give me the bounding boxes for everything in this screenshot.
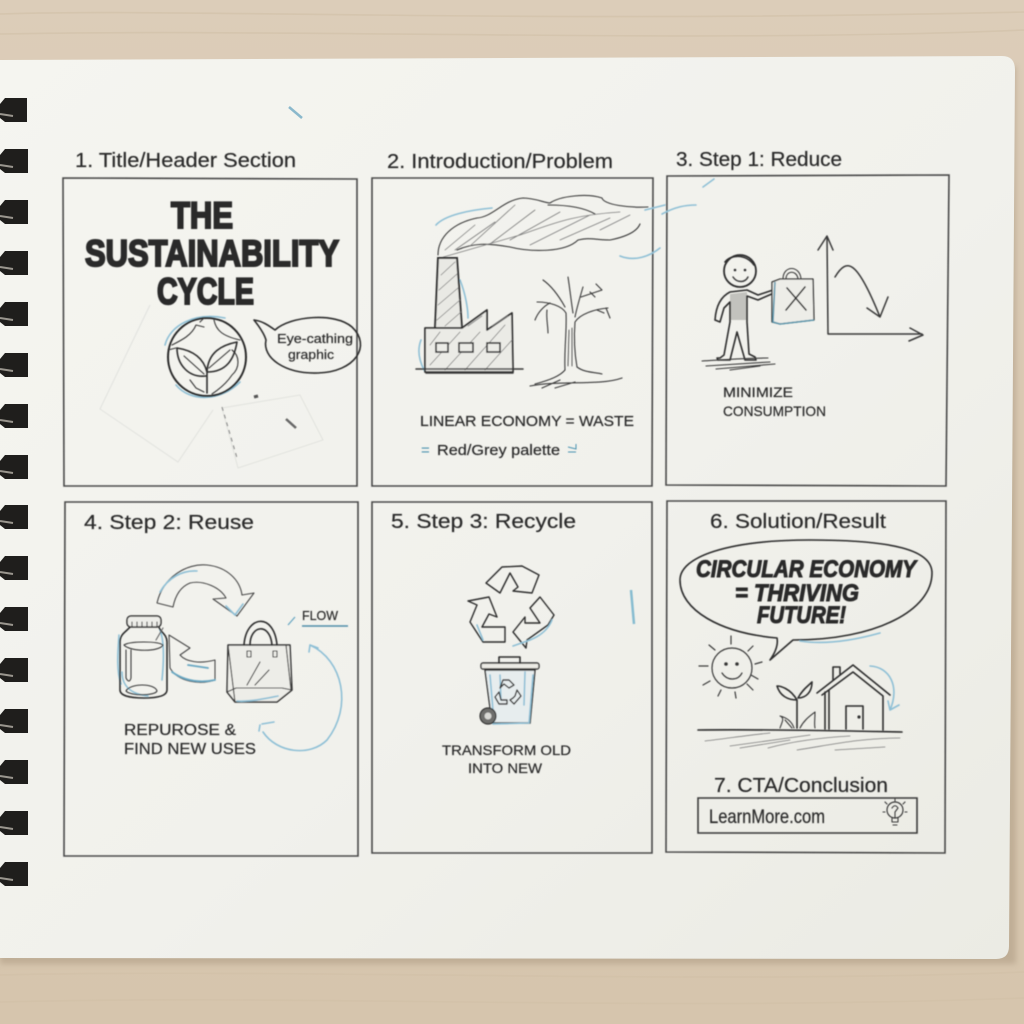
text: minimize consumption: CONSUMPTION bbox=[723, 403, 826, 419]
arrow: top curved reuse arrow bbox=[157, 565, 254, 616]
text: repurpose and find new uses: FIND NEW USES bbox=[124, 741, 256, 758]
icon: tote bag bbox=[227, 621, 292, 702]
text: red and grey palette note: = bbox=[421, 442, 430, 459]
callout: eye-catching graphic: Eye-cathing bbox=[277, 331, 353, 346]
arrow: lower return arrow bbox=[169, 635, 215, 682]
panel 3 frame bbox=[666, 175, 949, 486]
text: red and grey palette note: Red/Grey palette bbox=[437, 442, 560, 459]
panel 2: introduction and problem bbox=[372, 151, 665, 486]
main title: CYCLE bbox=[157, 271, 254, 312]
speech bubble: circular economy result bbox=[680, 540, 932, 660]
callout: eye-catching graphic bbox=[254, 317, 360, 373]
text: transform old into new bbox=[442, 742, 571, 776]
text: repurpose and find new uses: REPUROSE & bbox=[124, 722, 236, 739]
panel 3 heading: 3. Step 1: Reduce bbox=[676, 149, 842, 171]
icon: bare tree bbox=[530, 277, 622, 388]
icon: factory with smoke bbox=[416, 196, 665, 373]
panel 5 heading: 5. Step 3: Recycle bbox=[391, 511, 576, 533]
speech bubble: circular economy result: FUTURE! bbox=[757, 602, 846, 629]
icon: recycling arrows bbox=[468, 566, 554, 648]
chimney bbox=[435, 258, 462, 328]
website text: LearnMore.com bbox=[709, 806, 825, 828]
chart: falling consumption arrow bbox=[818, 236, 923, 341]
text: minimize consumption bbox=[723, 384, 826, 419]
panel 1: title and header section bbox=[63, 150, 360, 486]
panel 4 frame bbox=[64, 502, 358, 856]
label: flow with underline: FLOW bbox=[302, 609, 338, 623]
text: minimize consumption: MINIMIZE bbox=[723, 384, 793, 400]
panel 4 heading: 4. Step 2: Reuse bbox=[84, 512, 254, 534]
icon: recycling bin bbox=[480, 657, 539, 724]
smoke cloud bbox=[438, 196, 648, 255]
panel 4: step 2 reuse bbox=[64, 502, 358, 856]
speech bubble: circular economy result: CIRCULAR ECONOMY bbox=[696, 556, 918, 583]
icon: globe with leaves bbox=[165, 317, 246, 397]
callout: eye-catching graphic: graphic bbox=[288, 347, 335, 362]
panel 2 heading: 2. Introduction/Problem bbox=[387, 151, 613, 173]
icon: smiling sun bbox=[699, 636, 762, 698]
spiral binding rings bbox=[0, 98, 28, 886]
panel 6 heading: 6. Solution/Result bbox=[710, 511, 886, 533]
factory building bbox=[425, 310, 513, 372]
panel 5: step 3 recycle bbox=[372, 502, 652, 853]
icon: glass jar bbox=[118, 616, 167, 698]
panel 7 heading: 7. CTA/Conclusion bbox=[714, 775, 888, 797]
panel 1 frame bbox=[63, 178, 357, 486]
text: repurpose and find new uses bbox=[124, 722, 256, 758]
text: transform old into new: INTO NEW bbox=[468, 760, 543, 776]
panel 1 heading: 1. Title/Header Section bbox=[75, 150, 296, 172]
main title: THE bbox=[171, 195, 233, 236]
main title bbox=[85, 195, 339, 312]
call to action box bbox=[698, 798, 917, 833]
stray blue mark bbox=[289, 107, 302, 118]
label: flow with underline bbox=[288, 609, 348, 626]
blue pen mark bbox=[631, 590, 634, 624]
panel 6: solution and result bbox=[666, 501, 946, 853]
panel 6 frame bbox=[666, 501, 946, 853]
text: transform old into new: TRANSFORM OLD bbox=[442, 742, 571, 758]
panel 5 frame bbox=[372, 502, 652, 853]
arrow: thin blue flow arrow bbox=[259, 645, 342, 751]
icon: plant and house on ground bbox=[698, 665, 902, 750]
shopping bag bbox=[772, 279, 814, 324]
pencil smudges bbox=[286, 419, 296, 428]
text: linear economy equals waste: LINEAR ECONOMY = WASTE bbox=[420, 413, 634, 430]
faint pencil sheets bbox=[100, 305, 323, 468]
blue pen marks bbox=[662, 179, 714, 214]
main title: SUSTAINABILITY bbox=[85, 233, 339, 274]
icon: stick figure with shopping bag bbox=[702, 255, 814, 370]
speech bubble: circular economy result: = THRIVING bbox=[735, 580, 859, 607]
panel 2 frame bbox=[372, 178, 653, 486]
icon: light bulb bbox=[883, 799, 907, 825]
panel 3: step 1 reduce bbox=[662, 149, 949, 486]
